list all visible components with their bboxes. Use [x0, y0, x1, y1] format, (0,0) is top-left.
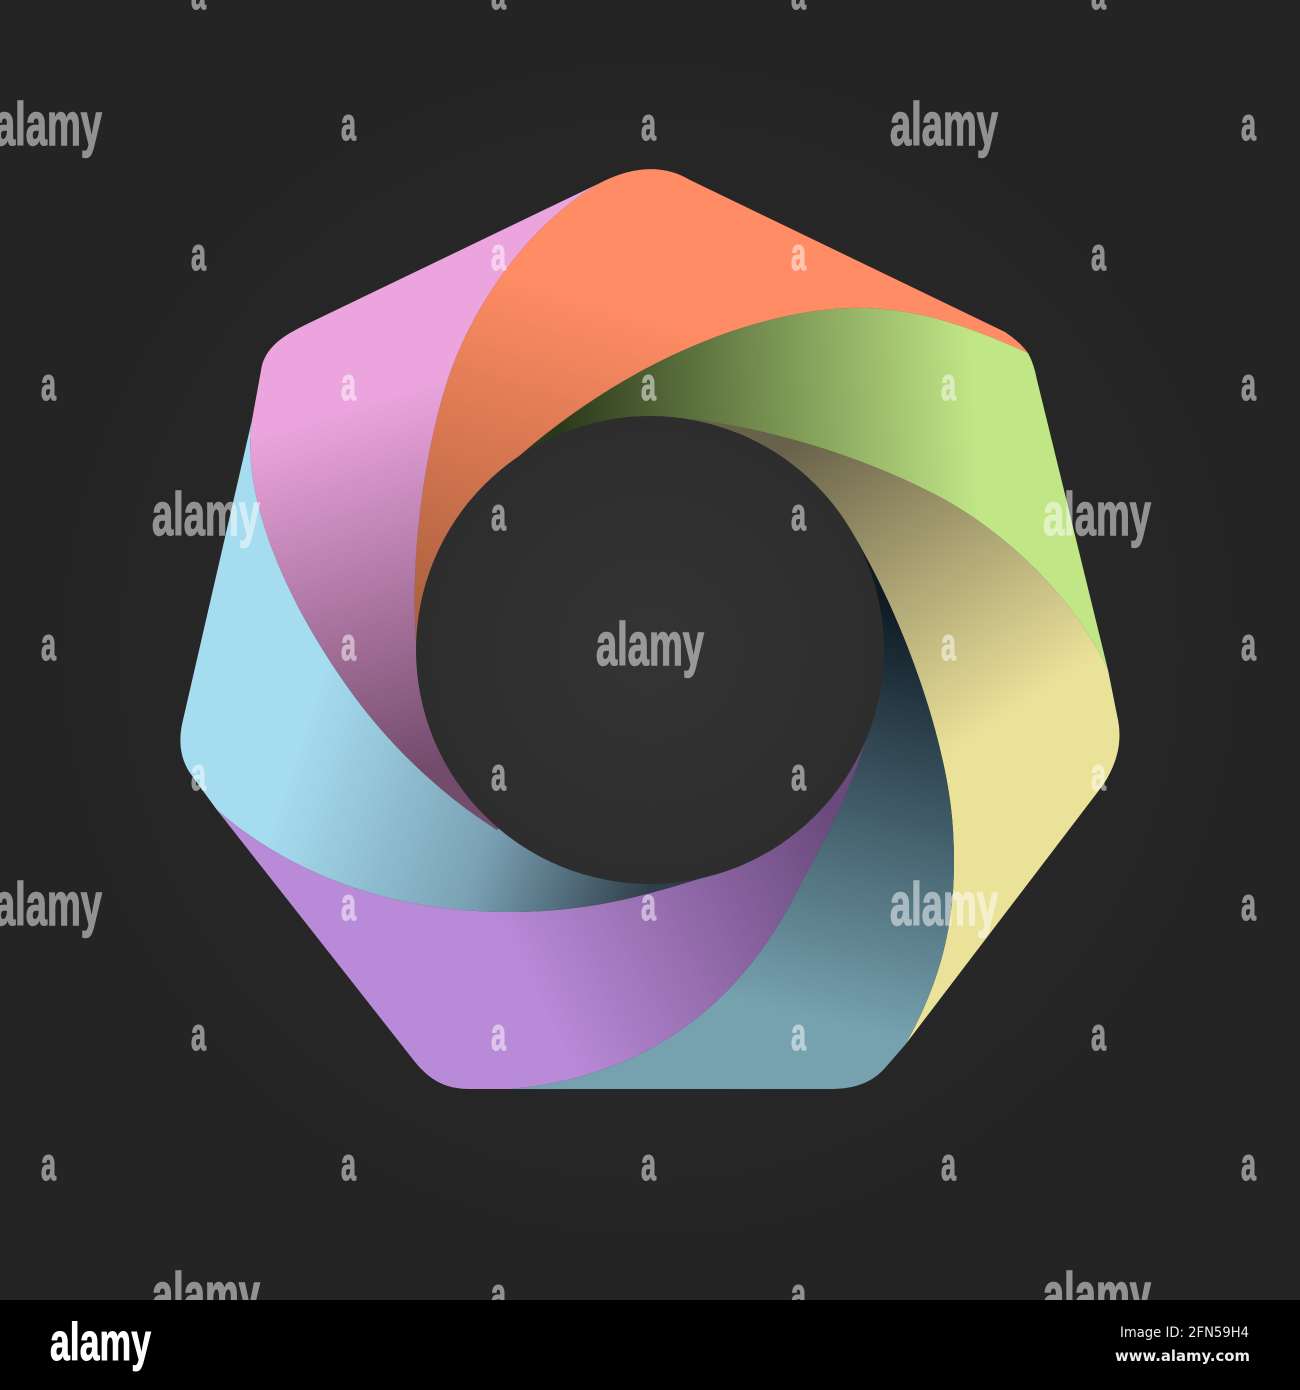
watermarks: a	[491, 228, 506, 280]
watermarks: a	[191, 748, 206, 800]
watermarks: a	[41, 618, 56, 670]
watermarks: a	[641, 98, 656, 150]
watermarks: alamy	[890, 871, 998, 938]
watermarks: a	[1241, 358, 1256, 410]
watermarks: a	[341, 98, 356, 150]
watermarks: a	[191, 1008, 206, 1060]
watermarks: a	[491, 748, 506, 800]
watermarks: a	[641, 1138, 656, 1190]
watermarks: a	[1241, 618, 1256, 670]
petal: pink	[250, 183, 650, 830]
watermarks: a	[641, 878, 656, 930]
watermarks: a	[791, 748, 806, 800]
petal: light blue	[180, 420, 720, 912]
watermarks: alamy	[596, 611, 704, 678]
website: www.alamy.com	[1115, 1347, 1250, 1365]
watermarks: a	[491, 1008, 506, 1060]
watermarks: alamy	[890, 91, 998, 158]
watermarks: a	[791, 1268, 806, 1320]
heptagon swirl logo	[180, 169, 1119, 1089]
watermarks: a	[1241, 1138, 1256, 1190]
watermarks: a	[491, 1268, 506, 1320]
petal: purple	[217, 650, 866, 1089]
watermarks: alamy	[1043, 1261, 1151, 1328]
watermarks: a	[941, 618, 956, 670]
image id: Image ID: 2FN59H4	[1120, 1325, 1249, 1341]
watermarks: a	[341, 618, 356, 670]
watermarks: alamy	[152, 1261, 260, 1328]
watermarks: a	[41, 358, 56, 410]
watermarks: a	[641, 358, 656, 410]
watermarks: alamy	[152, 481, 260, 548]
petal: yellow	[650, 419, 1119, 1045]
footer bar	[0, 1300, 1300, 1390]
watermarks: a	[941, 1138, 956, 1190]
watermarks: a	[491, 488, 506, 540]
watermarks: a	[1091, 228, 1106, 280]
watermarks: alamy	[1043, 481, 1151, 548]
petal: teal	[510, 529, 954, 1089]
watermarks: a	[1241, 878, 1256, 930]
inner circle	[416, 416, 884, 884]
watermarks: a	[341, 878, 356, 930]
petal: orange	[415, 169, 1028, 650]
watermarks: a	[791, 228, 806, 280]
watermarks: a	[191, 228, 206, 280]
watermarks: a	[1091, 748, 1106, 800]
watermarks: a	[941, 358, 956, 410]
watermarks: a	[1241, 98, 1256, 150]
watermarks: a	[41, 1138, 56, 1190]
petal: green	[463, 308, 1108, 670]
watermarks: a	[791, 488, 806, 540]
watermarks: a	[341, 1138, 356, 1190]
watermarks: a	[341, 358, 356, 410]
footer logo: alamy	[50, 1313, 151, 1372]
watermarks: a	[1091, 1008, 1106, 1060]
watermarks: a	[791, 1008, 806, 1060]
